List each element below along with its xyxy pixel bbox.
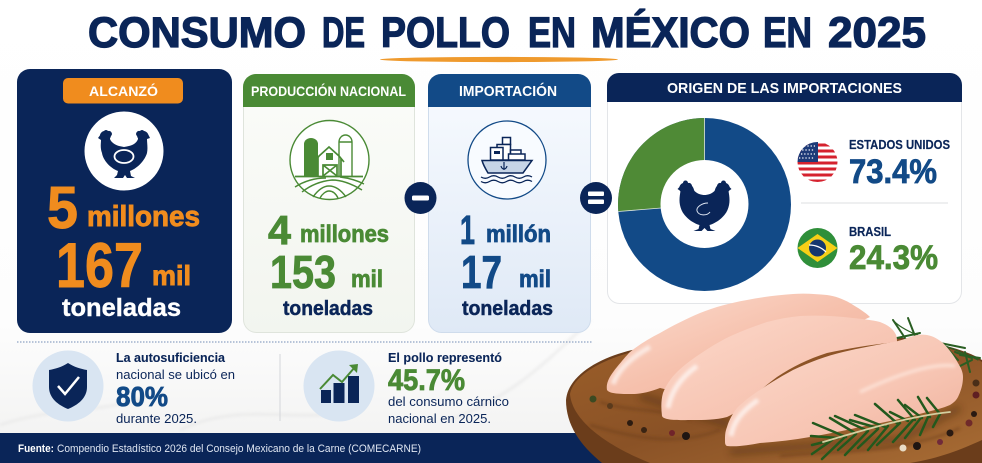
icon: hen: [678, 181, 732, 231]
value: 4 millones: millones: [300, 221, 389, 248]
value: 17 mil: 17: [461, 246, 502, 298]
title: POLLO: [381, 9, 510, 57]
header: importación: IMPORTACIÓN: [459, 82, 557, 100]
header: producción nacional: [243, 74, 415, 107]
photo: chicken breasts on wooden board: [566, 294, 982, 463]
donut chart: [618, 118, 791, 291]
icon: shield: [32, 350, 104, 422]
stat: autosuficiencia: [32, 350, 235, 426]
title: 2025: [828, 9, 926, 57]
legend: estados unidos: 73.4%: [849, 153, 937, 191]
title underline: [380, 57, 618, 62]
value: 1 millón: 1: [460, 207, 475, 253]
badge: alcanzó: ALCANZÓ: [89, 82, 158, 99]
title: EN: [528, 9, 576, 57]
value: 1 millón: [460, 207, 551, 253]
text: consumo cárnico: nacional en 2025.: [388, 411, 491, 426]
value: 5 millones: 5: [47, 175, 78, 241]
icon: brazil flag: [797, 228, 838, 268]
value: 5 millones: millones: [87, 201, 200, 233]
value: 4 millones: [268, 207, 389, 253]
text: autosuficiencia: nacional se ubicó en: [116, 367, 235, 382]
chicken breast 1: [607, 294, 870, 395]
footer source: Fuente:: [18, 443, 54, 455]
icon: farm: [290, 120, 369, 200]
text: autosuficiencia: [116, 350, 235, 426]
chicken breast 2: [661, 316, 897, 420]
value: 153 mil: 153: [270, 246, 336, 298]
legend: brasil: 24.3%: [849, 239, 938, 277]
stat: consumo cárnico: [304, 350, 509, 426]
unit: toneladas: toneladas: [62, 294, 181, 322]
wooden board: [566, 330, 982, 463]
rosemary back: [893, 318, 980, 372]
value: 17 mil: mil: [519, 266, 551, 293]
unit: toneladas: toneladas: [462, 298, 553, 320]
text: consumo cárnico: 45.7%: [388, 364, 465, 397]
icon: usa flag: [797, 142, 838, 182]
value: 153 mil: [270, 246, 383, 298]
unit: toneladas: toneladas: [283, 298, 373, 320]
text: autosuficiencia: 80%: [116, 381, 168, 412]
header: producción nacional: PRODUCCIÓN NACIONAL: [251, 82, 406, 99]
value: 153 mil: mil: [351, 266, 383, 293]
text: consumo cárnico: del consumo cárnico: [388, 394, 509, 409]
title: EN: [763, 9, 812, 57]
title: [88, 9, 926, 57]
minus operator: [404, 182, 436, 214]
title: DE: [322, 9, 365, 57]
legend: brasil: [849, 225, 938, 277]
text: consumo cárnico: El pollo representó: [388, 350, 502, 365]
peppercorns: [590, 380, 980, 452]
chicken breast 3: [725, 335, 963, 446]
text: autosuficiencia: La autosuficiencia: [116, 350, 226, 365]
legend: estados unidos: [849, 138, 950, 191]
header: origen: [607, 73, 962, 102]
title: CONSUMO: [88, 9, 306, 57]
text: autosuficiencia: durante 2025.: [116, 411, 197, 426]
value: 4 millones: 4: [268, 207, 291, 253]
footer source: Compendio Estadístico 2026 del Consejo Mexicano de la Carne (COMECARNE): [57, 443, 421, 455]
panel: total consumption: [17, 69, 232, 333]
legend: estados unidos: ESTADOS UNIDOS: [849, 138, 950, 152]
text: consumo cárnico: [388, 350, 509, 426]
value: 167 mil: mil: [152, 260, 191, 291]
panel: importación: [428, 74, 591, 332]
rosemary sprig: [811, 397, 950, 459]
value: 167 mil: 167: [56, 231, 143, 301]
icon: cargo ship: [468, 121, 546, 199]
footer source: [0, 433, 610, 463]
icon: hen: [84, 112, 164, 190]
value: 1 millón: millón: [486, 221, 551, 248]
value: 17 mil: [461, 246, 551, 298]
panel: producción nacional: [243, 74, 415, 332]
header: origen: ORIGEN DE LAS IMPORTACIONES: [667, 80, 902, 97]
equals operator: [580, 182, 612, 214]
title: MÉXICO: [591, 9, 750, 57]
icon: growth chart: [304, 350, 374, 422]
legend: brasil: BRASIL: [849, 225, 891, 239]
panel: origen de las importaciones: [607, 73, 962, 304]
value: 5 millones: [47, 175, 200, 241]
badge: alcanzó: [63, 78, 183, 104]
header: importación: [428, 74, 591, 107]
